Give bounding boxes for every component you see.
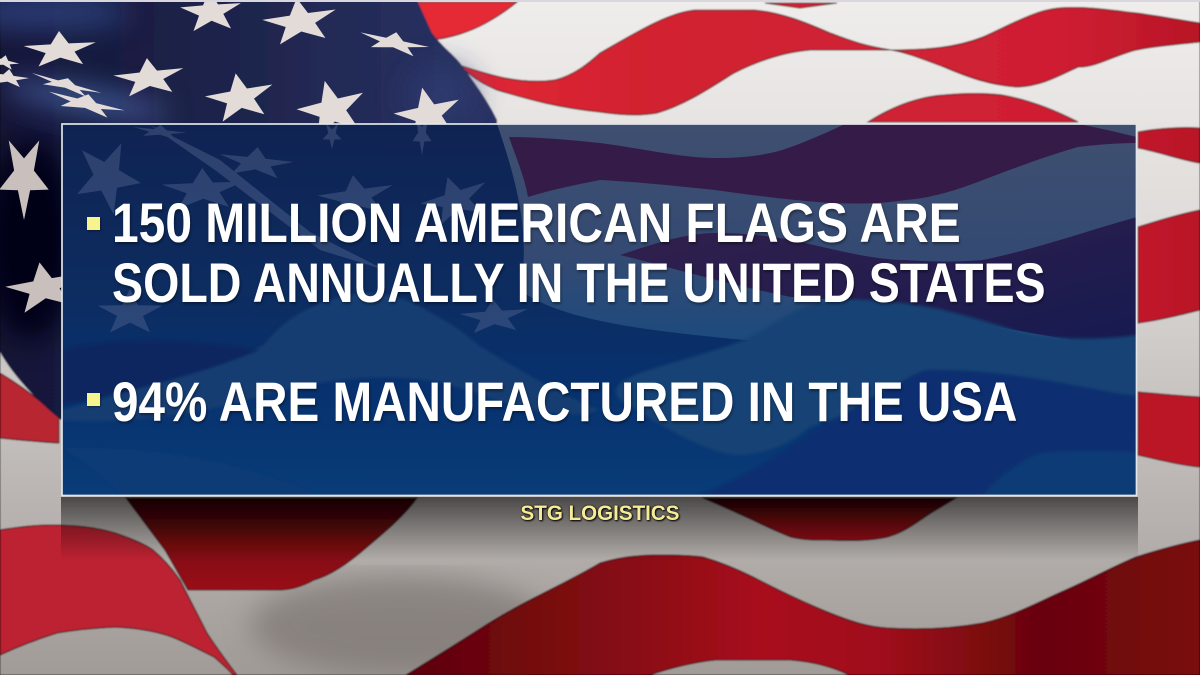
caption strip <box>61 497 1138 560</box>
source label: STG LOGISTICS <box>521 502 679 525</box>
icon: flag stars <box>0 0 465 315</box>
panel border <box>62 124 1136 496</box>
canton <box>0 0 500 420</box>
text: first statement: SOLD ANNUALLY IN THE UNITED STATES <box>112 251 1046 314</box>
panel: faint stars seen through <box>70 119 529 334</box>
panel: upper purple band <box>509 124 1137 204</box>
panel: lower purple band <box>620 217 1137 345</box>
cloth shading <box>250 575 550 675</box>
top stripes <box>417 2 1200 467</box>
text: first statement: 150 MILLION AMERICAN FLAGS ARE <box>112 191 961 254</box>
text: first statement <box>112 191 1046 314</box>
panel: white stripes seen through <box>497 124 1137 342</box>
panel: blue translucent box <box>62 119 1137 496</box>
bullet: first <box>87 217 100 230</box>
lower left and lower stripes <box>0 373 1200 675</box>
bullet: second <box>87 393 100 406</box>
canton shading <box>0 0 475 340</box>
text: second statement: 94% ARE MANUFACTURED IN THE USA <box>112 370 1017 433</box>
panel: blue waves <box>62 293 1137 496</box>
